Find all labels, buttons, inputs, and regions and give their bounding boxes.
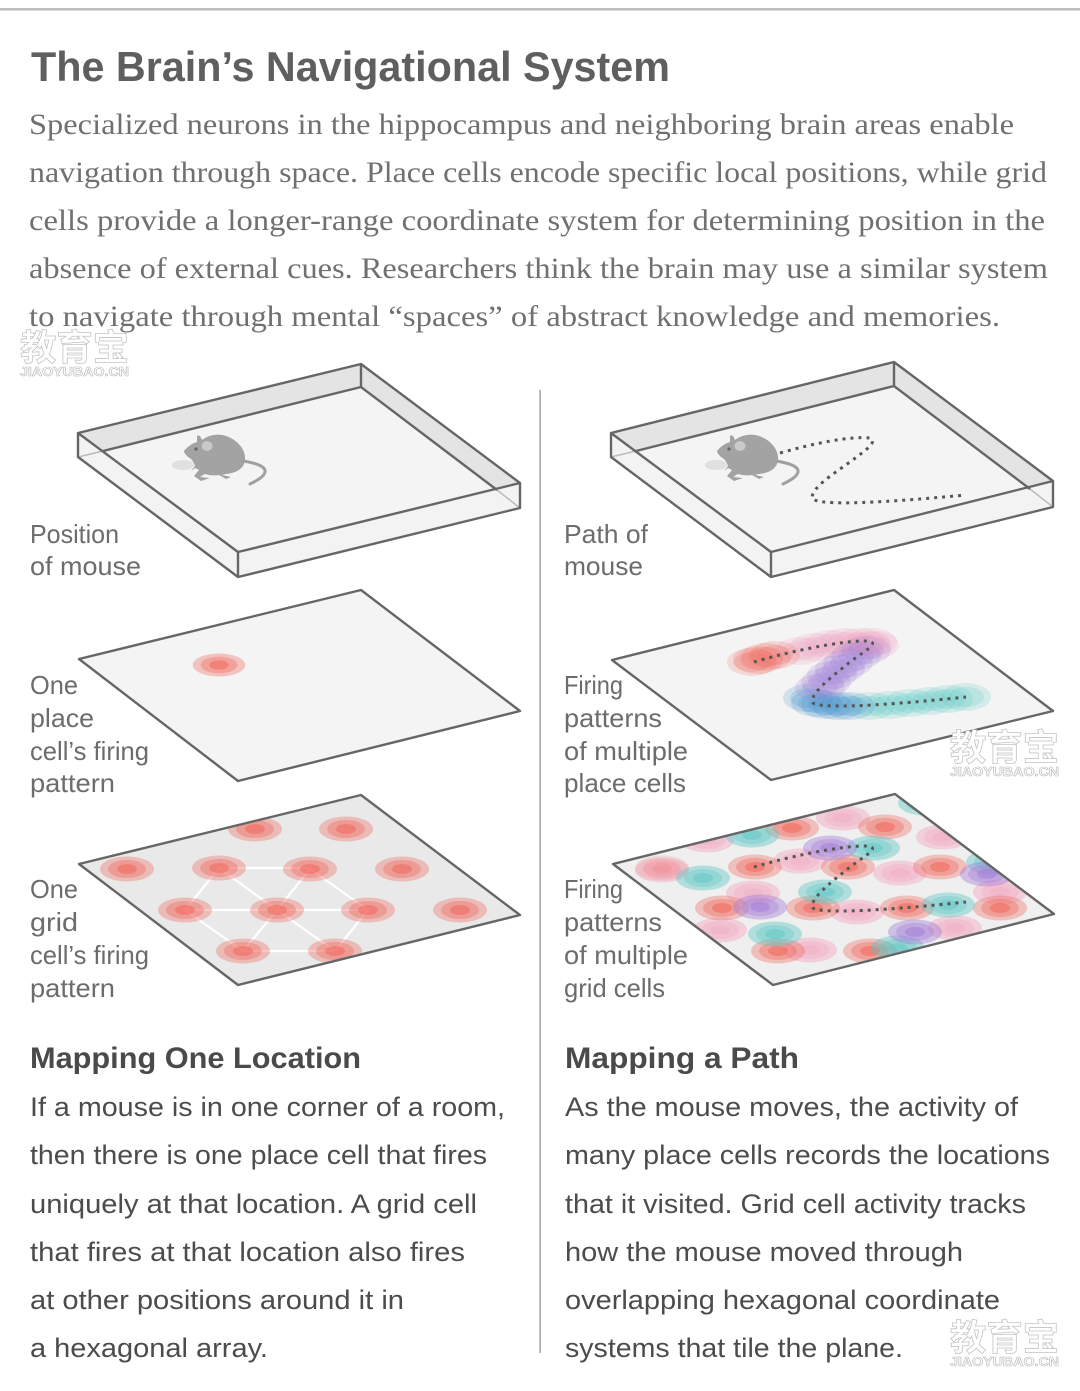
label: multiple place cells: of multiple [564, 736, 688, 766]
text: mapping one location [30, 1092, 505, 1363]
label: multiple place cells: Firing [564, 670, 623, 700]
label: one place cell: place [30, 703, 94, 733]
panel: one place cell plane [79, 590, 520, 781]
intro paragraph: navigation through space. Place cells encode specific local positions, while grid [29, 156, 1047, 189]
top rule [0, 8, 1080, 10]
label: one grid cell: cell’s firing [30, 940, 149, 970]
label: multiple grid cells [564, 874, 688, 1003]
place fields along path [727, 628, 991, 720]
heading: mapping one location: Mapping One Location [30, 1042, 361, 1075]
icon: mouse [172, 435, 265, 484]
watermark: top left: JIAOYUBAO.CN [20, 365, 129, 379]
panel: multiple place cells plane [612, 590, 1053, 780]
label: path of mouse [564, 519, 649, 581]
text: mapping one location: uniquely at that location. A grid cell [30, 1189, 477, 1219]
intro paragraph: cells provide a longer-range coordinate system for determining position in the [29, 204, 1045, 237]
text: mapping a path: As the mouse moves, the activity of [565, 1092, 1019, 1122]
center divider [540, 390, 541, 1353]
label: one grid cell: pattern [30, 973, 115, 1003]
text: mapping one location: that fires at that location also fires [30, 1237, 465, 1267]
dotted path [754, 641, 966, 706]
watermark: bottom right: JIAOYUBAO.CN [950, 1355, 1059, 1369]
text: mapping a path: overlapping hexagonal coordinate [565, 1285, 1000, 1315]
text: mapping a path: many place cells records the locations [565, 1140, 1050, 1170]
heading: mapping a path: Mapping a Path [565, 1042, 799, 1075]
grid fields [635, 790, 1027, 964]
label: one place cell: cell’s firing [30, 736, 149, 766]
watermark: top left: 教育宝 [20, 319, 129, 371]
icon: mouse [705, 435, 798, 484]
label: multiple place cells: patterns [564, 703, 662, 733]
hexagonal lattice [185, 868, 368, 951]
text: mapping a path: systems that tile the plane. [565, 1333, 903, 1363]
text: mapping one location: a hexagonal array. [30, 1333, 268, 1363]
label: position of mouse: Position [30, 519, 119, 549]
text: mapping a path: how the mouse moved through [565, 1237, 963, 1267]
watermark: middle right: 教育宝 [950, 719, 1059, 771]
intro paragraph: to navigate through mental “spaces” of abstract knowledge and memories. [29, 300, 1000, 333]
title: The Brain’s Navigational System [31, 43, 670, 90]
place field [193, 654, 245, 676]
label: one grid cell [30, 874, 149, 1003]
label: path of mouse: Path of [564, 519, 649, 549]
panel: one grid cell plane [79, 795, 520, 985]
text: mapping one location: If a mouse is in one corner of a room, [30, 1092, 505, 1122]
grid fields [100, 816, 487, 964]
label: position of mouse [30, 519, 141, 581]
intro paragraph: Specialized neurons in the hippocampus and neighboring brain areas enable [29, 108, 1014, 141]
label: multiple place cells [564, 670, 688, 798]
panel: position of mouse box [78, 364, 520, 577]
text: mapping a path [565, 1092, 1050, 1363]
intro paragraph [29, 108, 1048, 333]
text: mapping one location: then there is one place cell that fires [30, 1140, 487, 1170]
text: mapping a path: that it visited. Grid cell activity tracks [565, 1189, 1026, 1219]
watermark: middle right: JIAOYUBAO.CN [950, 765, 1059, 779]
text: mapping one location: at other positions around it in [30, 1285, 404, 1315]
label: one place cell [30, 670, 149, 798]
dotted path [754, 846, 966, 911]
label: one grid cell: One [30, 874, 78, 904]
label: multiple grid cells: patterns [564, 907, 662, 937]
label: multiple place cells: place cells [564, 768, 686, 798]
label: path of mouse: mouse [564, 551, 643, 581]
panel: path of mouse box [611, 362, 1053, 577]
watermark: bottom right: 教育宝 [950, 1309, 1059, 1361]
label: multiple grid cells: grid cells [564, 973, 665, 1003]
label: position of mouse: of mouse [30, 551, 141, 581]
label: multiple grid cells: Firing [564, 874, 623, 904]
label: one place cell: One [30, 670, 78, 700]
label: multiple grid cells: of multiple [564, 940, 688, 970]
label: one place cell: pattern [30, 768, 115, 798]
panel: multiple grid cells plane [613, 790, 1054, 985]
intro paragraph: absence of external cues. Researchers think the brain may use a similar system [29, 252, 1048, 285]
dotted path [780, 438, 966, 503]
label: one grid cell: grid [30, 907, 78, 937]
